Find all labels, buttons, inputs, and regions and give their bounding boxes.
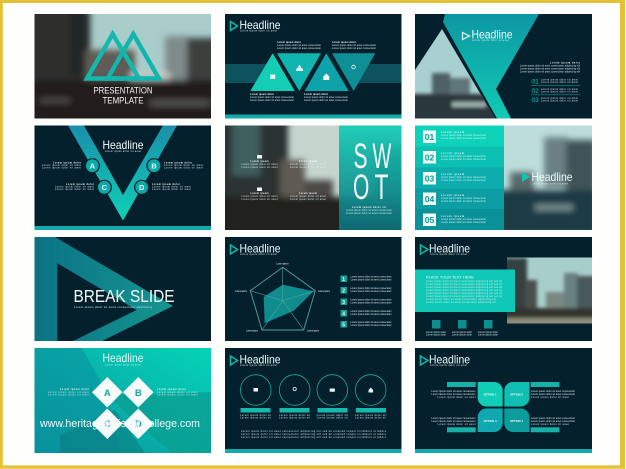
cover title xyxy=(94,86,152,106)
text block: Lorem ipsum dolor xyxy=(550,62,580,64)
option text: Lorem ipsum dolor sit amet xyxy=(438,423,476,426)
text block xyxy=(520,62,580,74)
captions: Lorem ipsum dolor xyxy=(304,94,328,96)
headline: Lorem ipsum dolor sit amet xyxy=(430,364,467,367)
slide 8: radar chart xyxy=(225,237,402,341)
headline xyxy=(522,170,573,186)
band text: Lorem ipsum dolor sit amet consectetur xyxy=(441,176,486,179)
numbered legend: Lorem ipsum dolor sit amet consectetur xyxy=(350,324,392,327)
option text: Lorem ipsum dolor sit amet consectetur xyxy=(432,420,476,423)
band text: Lorem ipsum dolor sit amet consectetur xyxy=(441,158,486,161)
numbered list: 01 xyxy=(532,78,539,86)
captions: Lorem ipsum dolor xyxy=(250,94,274,96)
slide 7: break slide xyxy=(34,237,211,341)
photo captions: Lorem ipsum dolor sit amet xyxy=(290,198,326,201)
box text xyxy=(426,274,503,304)
icon captions xyxy=(426,331,498,336)
photo captions: Lorem ipsum dolor sit amet xyxy=(242,166,278,169)
blurred photo xyxy=(507,258,592,324)
text block: Lorem ipsum dolor sit amet consectetur adipiscing elit xyxy=(520,64,580,68)
box text: Lorem ipsum dolor sit amet consectetur adipiscing elit sed do xyxy=(426,286,503,289)
numbered list: Lorem ipsum dolor sit amet xyxy=(541,90,578,94)
headline: Headline xyxy=(240,18,281,32)
SWOT caption: Lorem ipsum dolor sit amet consectetur xyxy=(346,209,392,212)
text block: Lorem ipsum dolor sit amet consectetur adipiscing elit xyxy=(520,68,580,70)
slide 10: four circles xyxy=(225,348,402,453)
numbers: 04 xyxy=(425,194,434,204)
captions: Lorem ipsum dolor sit amet consectetur xyxy=(277,44,321,47)
slide 4: V shape with A B C D: C xyxy=(102,183,108,192)
SWOT letters: T xyxy=(374,168,388,207)
photo captions: Lorem ipsum dolor sit amet xyxy=(242,195,278,198)
headline: Headline xyxy=(102,138,144,152)
band text: Lorem ipsum dolor sit amet consectetur xyxy=(441,197,486,200)
slide 4: V shape with A B C D: A xyxy=(90,162,96,170)
slide 9: diamonds on teal xyxy=(34,348,211,453)
numbers: 01 xyxy=(425,132,434,142)
numbered list: 02 xyxy=(532,88,539,95)
numbered list: Lorem ipsum dolor sit amet xyxy=(541,78,578,82)
photo captions: Lorem ipsum dolor sit amet xyxy=(242,198,278,201)
slide 7: break slide: Lorem ipsum dolor sit amet consectetur adipiscing xyxy=(74,305,152,309)
photo captions: Lorem ipsum dolor sit amet xyxy=(290,195,326,198)
numbered legend: Lorem ipsum dolor sit amet consectetur xyxy=(350,310,392,313)
circle icons xyxy=(254,387,373,392)
photo captions xyxy=(242,155,326,201)
numbered legend: Lorem ipsum dolor sit amet consectetur xyxy=(350,276,392,278)
numbered list xyxy=(531,78,580,104)
headline: Headline xyxy=(532,170,573,184)
captions: Lorem ipsum dolor sit amet xyxy=(55,186,94,188)
slide 1: presentation template cover xyxy=(34,14,211,118)
triangles xyxy=(250,53,295,91)
band xyxy=(225,64,402,83)
blurred photo xyxy=(504,126,592,230)
numbered legend: 1 xyxy=(342,277,345,283)
band text: Lorem ipsum dolor sit amet consectetur xyxy=(441,200,486,203)
captions: Lorem ipsum dolor sit amet xyxy=(152,188,191,191)
slide 9: diamonds on teal: C xyxy=(104,419,111,430)
petal labels xyxy=(483,392,523,423)
option text: Lorem ipsum dolor sit amet consectetur xyxy=(432,390,476,393)
diamonds xyxy=(92,377,154,439)
numbered legend: Lorem ipsum dolor sit amet consectetur xyxy=(350,278,392,282)
headline: Lorem ipsum dolor sit amet xyxy=(430,253,467,256)
circle captions: Lorem ipsum dolor sit xyxy=(240,414,272,417)
captions: Lorem ipsum dolor xyxy=(152,184,180,186)
captions xyxy=(42,162,203,191)
logo: twin triangles xyxy=(87,34,159,78)
photo triangle xyxy=(415,29,495,118)
blurred photo xyxy=(225,126,402,230)
numbers xyxy=(423,130,436,226)
bands xyxy=(415,126,504,230)
photo captions: Lorem ipsum xyxy=(299,193,317,195)
SWOT panel xyxy=(339,126,402,230)
watermark: www.heritagechristiancollege.com xyxy=(39,418,200,430)
numbers: 02 xyxy=(425,152,434,162)
captions: Lorem ipsum dolor sit amet consectetur xyxy=(250,96,294,99)
icon captions: Lorem ipsum dolor xyxy=(452,331,472,334)
band text: Lorem ipsum dolor sit amet consectetur xyxy=(441,221,486,224)
band text: Lorem ipsum xyxy=(441,216,464,218)
cover title: TEMPLATE xyxy=(102,96,144,106)
SWOT caption xyxy=(346,206,392,215)
captions: Lorem ipsum dolor xyxy=(66,184,94,186)
slide 9: diamonds on teal: Lorem ipsum dolor sit amet xyxy=(157,391,198,394)
SWOT caption: Lorem ipsum dolor sit amet consectetur xyxy=(346,212,392,215)
slide 5: SWOT xyxy=(225,126,402,230)
band text: Lorem ipsum xyxy=(441,132,464,134)
circle captions: Lorem ipsum dolor sit xyxy=(279,416,311,420)
paragraph: Lorem ipsum dolor sit amet consectetur adipiscing elit sed do eiusmod tempor incididunt ut labore xyxy=(241,433,387,436)
option text: Lorem ipsum dolor sit amet xyxy=(438,396,476,399)
paragraph xyxy=(241,430,387,439)
slide 11: photo with text box xyxy=(415,237,597,341)
radar labels: Lorem ipsum xyxy=(235,290,247,293)
option text: Lorem ipsum dolor sit amet consectetur xyxy=(531,420,575,423)
blurred city photo xyxy=(34,14,211,118)
headline: Headline xyxy=(240,242,281,256)
box text: Lorem ipsum dolor sit amet consectetur adipiscing elit sed do xyxy=(426,292,503,295)
title: BREAK SLIDE xyxy=(74,286,174,306)
band text: Lorem ipsum xyxy=(441,195,464,197)
captions: Lorem ipsum dolor sit amet xyxy=(152,186,191,188)
photo captions: Lorem ipsum xyxy=(250,161,268,163)
SWOT caption: Lorem ipsum dolor sit xyxy=(352,206,386,209)
circle captions xyxy=(240,414,387,420)
option text: Lorem ipsum dolor sit amet consectetur xyxy=(432,417,476,420)
option text: Lorem ipsum dolor sit amet consectetur xyxy=(531,417,575,420)
slide 2: four triangles xyxy=(225,14,402,118)
numbered list: 03 xyxy=(532,97,539,104)
captions: Lorem ipsum dolor xyxy=(164,162,192,164)
numbered legend: Lorem ipsum dolor sit amet consectetur xyxy=(350,290,392,293)
captions: Lorem ipsum dolor sit amet xyxy=(48,394,89,396)
badges xyxy=(85,159,161,194)
option text: Lorem ipsum dolor sit amet xyxy=(531,423,569,426)
slide 9: diamonds on teal: B xyxy=(135,388,142,399)
numbered legend: 4 xyxy=(342,311,345,317)
triangle outline xyxy=(34,237,173,341)
headline: Lorem ipsum dolor sit amet xyxy=(240,364,277,367)
numbered legend: Lorem ipsum dolor sit amet consectetur xyxy=(350,302,392,304)
petal labels: OPTION 4 xyxy=(510,419,523,423)
captions: Lorem ipsum dolor sit amet consectetur xyxy=(250,99,294,102)
box text: Lorem ipsum dolor sit amet consectetur adipiscing elit sed do xyxy=(426,295,503,298)
icon squares xyxy=(432,320,492,328)
circle captions: Lorem ipsum dolor sit xyxy=(317,414,348,417)
headline: Lorem ipsum dolor sit amet xyxy=(240,30,277,32)
numbered legend: Lorem ipsum dolor sit amet consectetur xyxy=(350,287,392,290)
captions: Lorem ipsum dolor xyxy=(277,42,301,44)
circle captions: Lorem ipsum dolor sit xyxy=(240,416,272,420)
numbered legend: 5 xyxy=(342,322,345,328)
icon captions: Lorem ipsum dolor xyxy=(426,331,446,334)
captions: Lorem ipsum dolor sit amet consectetur xyxy=(304,96,348,99)
captions: Lorem ipsum dolor sit amet xyxy=(42,164,81,167)
numbered legend: Lorem ipsum dolor sit amet consectetur xyxy=(350,321,392,324)
circle captions: Lorem ipsum dolor sit xyxy=(279,414,311,417)
cover title: PRESENTATION xyxy=(94,86,152,96)
box text: Lorem ipsum dolor sit amet consectetur adipiscing elit xyxy=(426,301,496,304)
option text: Lorem ipsum dolor sit amet consectetur xyxy=(432,393,476,396)
slide 9: diamonds on teal: A xyxy=(104,388,111,399)
headline: Headline xyxy=(472,28,513,42)
band text: Lorem ipsum dolor sit amet consectetur xyxy=(441,155,486,158)
facets xyxy=(34,348,211,453)
numbered legend: Lorem ipsum dolor sit amet consectetur xyxy=(350,298,392,302)
radar chart xyxy=(250,267,315,330)
captions: Lorem ipsum dolor xyxy=(60,389,89,391)
SWOT letters: O xyxy=(353,169,369,207)
band text: Lorem ipsum dolor sit amet consectetur xyxy=(441,134,486,137)
numbered list: Lorem ipsum dolor sit amet xyxy=(541,81,578,84)
text block: Lorem ipsum dolor sit amet consectetur adipiscing elit xyxy=(520,70,580,74)
icon captions: Lorem ipsum dolor xyxy=(452,334,472,336)
slide 6: numbered bands xyxy=(415,126,598,235)
option text: Lorem ipsum dolor sit amet consectetur xyxy=(531,390,575,393)
icon captions: Lorem ipsum dolor xyxy=(426,334,446,336)
triangle icons xyxy=(270,65,355,80)
box text: PLACE YOUR TEXT HERE xyxy=(426,274,474,280)
captions: Lorem ipsum dolor sit amet xyxy=(164,166,203,170)
slide 4: V shape with A B C D: Lorem ipsum dolor sit amet xyxy=(105,150,141,153)
band text: Lorem ipsum dolor sit amet consectetur xyxy=(441,179,486,182)
numbered legend: 3 xyxy=(342,300,345,306)
circle captions: Lorem ipsum dolor sit xyxy=(355,416,387,420)
photo captions: Lorem ipsum dolor sit amet xyxy=(290,163,326,166)
slide 9: diamonds on teal: D xyxy=(135,419,142,430)
radar labels xyxy=(235,262,330,332)
option text: Lorem ipsum dolor sit amet xyxy=(531,396,569,399)
band text: Lorem ipsum dolor sit amet consectetur xyxy=(441,137,486,140)
band text: Lorem ipsum dolor sit amet consectetur xyxy=(441,218,486,221)
slide 12: four options xyxy=(415,348,592,453)
slide 4: V shape with A B C D xyxy=(34,126,211,230)
numbered legend: Lorem ipsum dolor sit amet consectetur xyxy=(350,313,392,316)
headline: Lorem ipsum dolor sit amet xyxy=(532,182,568,186)
headline: Headline xyxy=(102,351,144,365)
slide 3: angled photo xyxy=(410,14,592,124)
petal labels: OPTION 2 xyxy=(510,392,523,396)
numbered legend: 2 xyxy=(342,288,345,294)
captions: Lorem ipsum dolor sit amet xyxy=(55,188,94,191)
tags xyxy=(447,382,559,432)
icon captions: Lorem ipsum dolor xyxy=(478,331,498,334)
headline: Headline xyxy=(240,352,281,366)
numbered list: Lorem ipsum dolor sit amet xyxy=(541,97,578,100)
headline: Headline xyxy=(429,242,470,256)
captions: Lorem ipsum dolor xyxy=(332,42,356,44)
photo captions: Lorem ipsum xyxy=(299,161,317,163)
text box xyxy=(415,270,515,312)
slide 4: V shape with A B C D: D xyxy=(139,183,145,192)
SWOT letters: S xyxy=(354,138,368,176)
captions xyxy=(48,389,89,396)
box text: Lorem ipsum dolor sit amet consectetur adipiscing elit sed do xyxy=(426,280,503,283)
photo captions: Lorem ipsum dolor sit amet xyxy=(290,166,326,169)
circles xyxy=(240,375,386,405)
captions: Lorem ipsum dolor sit amet consectetur xyxy=(277,47,321,50)
box text: Lorem ipsum dolor sit amet consectetur adipiscing elit sed do xyxy=(426,289,503,292)
captions: Lorem ipsum dolor sit amet xyxy=(48,391,89,394)
band text xyxy=(441,132,486,224)
radar labels: Lorem ipsum xyxy=(276,262,289,266)
option text xyxy=(432,390,575,426)
captions: Lorem ipsum dolor sit amet consectetur xyxy=(304,99,348,102)
slide 9: diamonds on teal: Lorem ipsum dolor sit amet xyxy=(157,394,198,396)
captions xyxy=(250,42,376,102)
radar labels: Lorem ipsum xyxy=(307,330,319,332)
icon captions: Lorem ipsum dolor xyxy=(478,334,498,336)
label bars xyxy=(240,408,386,412)
numbers: 03 xyxy=(425,174,434,184)
captions: Lorem ipsum dolor xyxy=(53,162,81,164)
box text: Lorem ipsum dolor sit amet consectetur adipiscing elit xyxy=(426,298,496,301)
SWOT letters xyxy=(353,137,391,207)
captions: Lorem ipsum dolor sit amet xyxy=(42,166,81,170)
photo captions: Lorem ipsum dolor sit amet xyxy=(242,163,278,166)
V shape xyxy=(68,126,177,220)
petal labels: OPTION 1 xyxy=(483,392,497,396)
headline: Lorem ipsum dolor sit amet xyxy=(472,39,509,42)
circle captions: Lorem ipsum dolor sit xyxy=(317,416,348,420)
captions: Lorem ipsum dolor sit amet consectetur xyxy=(332,47,376,50)
paragraph: Lorem ipsum dolor sit amet consectetur adipiscing elit sed do eiusmod tempor incididunt ut labore xyxy=(241,436,387,439)
numbered list: Lorem ipsum dolor sit amet xyxy=(541,88,578,91)
captions: Lorem ipsum dolor sit amet consectetur xyxy=(332,44,376,47)
radar labels: Lorem ipsum xyxy=(318,290,330,293)
band text: Lorem ipsum xyxy=(441,174,464,176)
circle captions: Lorem ipsum dolor sit xyxy=(355,414,387,417)
slide 4: V shape with A B C D: B xyxy=(151,162,157,170)
numbered list: Lorem ipsum dolor sit amet xyxy=(541,100,578,102)
teal shape xyxy=(443,14,539,118)
band text: Lorem ipsum xyxy=(441,153,464,155)
photo captions: Lorem ipsum xyxy=(250,193,268,195)
petal labels: OPTION 3 xyxy=(483,419,497,423)
box text: Lorem ipsum dolor sit amet consectetur adipiscing elit sed do xyxy=(426,283,503,286)
radar labels: Lorem ipsum xyxy=(246,330,258,332)
captions: Lorem ipsum dolor sit amet xyxy=(164,164,203,167)
SWOT letters: W xyxy=(372,137,391,177)
slide 9: diamonds on teal: Lorem ipsum dolor xyxy=(157,389,186,391)
headline: Lorem ipsum dolor sit amet xyxy=(240,253,277,256)
numbered legend xyxy=(340,276,392,328)
option text: Lorem ipsum dolor sit amet consectetur xyxy=(531,393,575,396)
headline: Headline xyxy=(429,352,470,366)
petals xyxy=(478,382,530,432)
slide 9: diamonds on teal: Lorem ipsum dolor sit amet xyxy=(105,364,141,366)
numbers: 05 xyxy=(425,215,434,225)
paragraph: Lorem ipsum dolor sit amet consectetur adipiscing elit sed do eiusmod tempor incididunt ut labore xyxy=(241,430,387,433)
